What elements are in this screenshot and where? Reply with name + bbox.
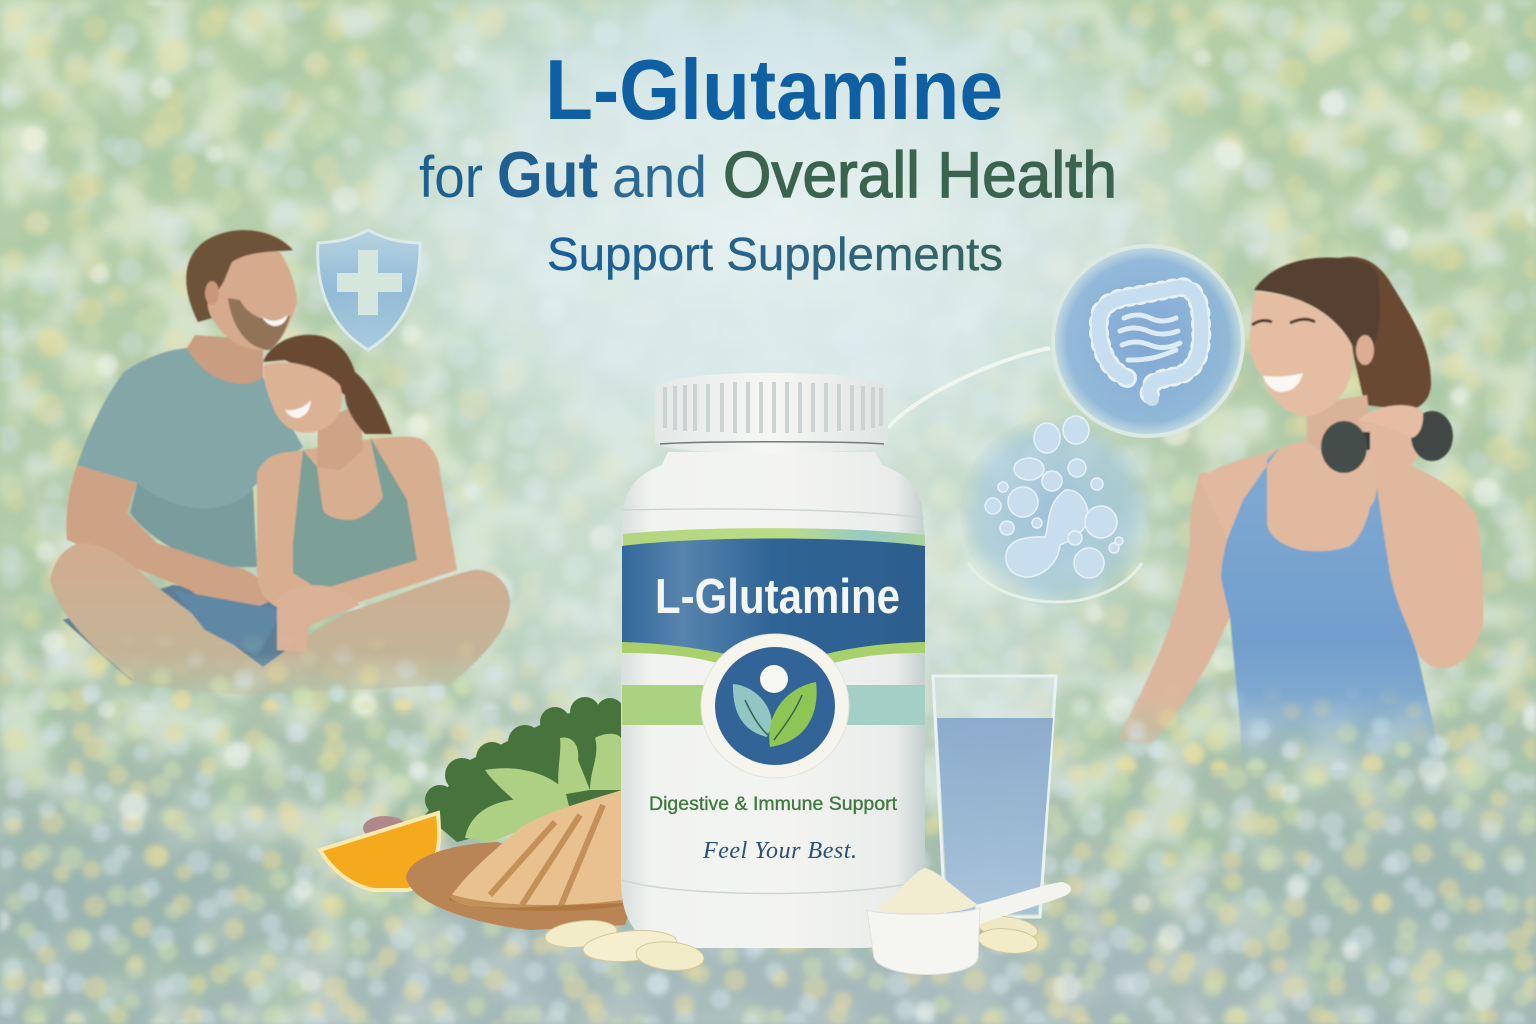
tank top — [1221, 447, 1442, 775]
glass of water — [933, 676, 1056, 917]
subheading: Support Supplements: Support Supplements — [547, 228, 1003, 280]
ponytail hair — [1320, 257, 1431, 410]
fingers — [1358, 405, 1423, 438]
woman hair — [263, 335, 392, 434]
man head — [205, 250, 297, 350]
label: green top stripe — [623, 528, 925, 548]
woman tank top — [293, 437, 417, 590]
tee shading — [130, 483, 257, 567]
supplement bottle — [621, 373, 925, 948]
icon: molecule circle — [960, 416, 1150, 607]
tagline: Digestive & Immune Support — [649, 794, 898, 815]
heading: for Gut and Overall Health: for — [419, 145, 483, 210]
berries — [363, 816, 407, 840]
label: bands — [622, 685, 722, 725]
label: green lower stripes — [622, 642, 925, 665]
heading: L-Glutamine: L-Glutamine — [545, 43, 1003, 138]
product name: L-Glutamine — [655, 570, 900, 624]
heading: for Gut and Overall Health — [419, 138, 1117, 211]
grilled chicken — [450, 790, 622, 908]
shorts front — [173, 590, 283, 657]
bottle cap — [655, 373, 888, 453]
scoop with powder — [867, 868, 1071, 974]
shorts — [63, 585, 300, 680]
face — [1250, 292, 1353, 416]
grill marks — [450, 805, 622, 908]
bokeh over woman waist — [1110, 680, 1450, 770]
label: blue band — [622, 538, 925, 655]
eyes and brows — [1252, 319, 1315, 325]
kale and broccoli crown — [425, 697, 624, 842]
man neck — [187, 335, 263, 384]
dumbbell — [1321, 411, 1453, 473]
woman face — [264, 362, 342, 433]
man beard — [228, 298, 290, 350]
woman with dumbbell illustration — [1117, 257, 1483, 775]
man ear — [205, 281, 219, 305]
woman right leg — [240, 570, 510, 695]
neck — [1307, 395, 1372, 462]
icon: shield with cross — [318, 230, 420, 350]
lemon wedge — [320, 813, 439, 890]
hair cap — [1254, 257, 1380, 350]
couple illustration — [50, 230, 510, 695]
heading: for Gut and Overall Health: and — [612, 145, 707, 210]
woman body skin — [257, 437, 457, 610]
slogan: Feel Your Best. — [702, 838, 857, 864]
left arm — [1117, 470, 1260, 745]
right upper arm and forearm — [1375, 455, 1483, 668]
bottle body — [621, 452, 925, 948]
man smile — [262, 315, 288, 326]
man arm — [66, 465, 273, 608]
hand — [1358, 405, 1424, 470]
plate — [406, 842, 640, 930]
man left leg — [50, 543, 263, 695]
icon: intestine circle — [1053, 246, 1243, 436]
bokeh over couple legs — [40, 630, 520, 710]
woman neck — [317, 405, 363, 470]
title — [419, 43, 1117, 280]
heading: for Gut and Overall Health: Gut — [497, 138, 598, 211]
woman hands — [277, 585, 360, 652]
food group — [320, 697, 640, 930]
bottle ring line — [622, 509, 925, 894]
ear — [1356, 335, 1374, 365]
torso skin — [1200, 440, 1415, 560]
man torso tee — [77, 348, 303, 567]
capsules — [544, 913, 1039, 973]
broccoli stalks — [465, 734, 622, 842]
smile — [1263, 373, 1303, 392]
heading: for Gut and Overall Health: Overall Health — [723, 138, 1117, 211]
woman smile — [285, 400, 311, 418]
connector arc to icons — [888, 348, 1050, 428]
man hair — [186, 230, 293, 322]
logo badge — [701, 634, 849, 778]
